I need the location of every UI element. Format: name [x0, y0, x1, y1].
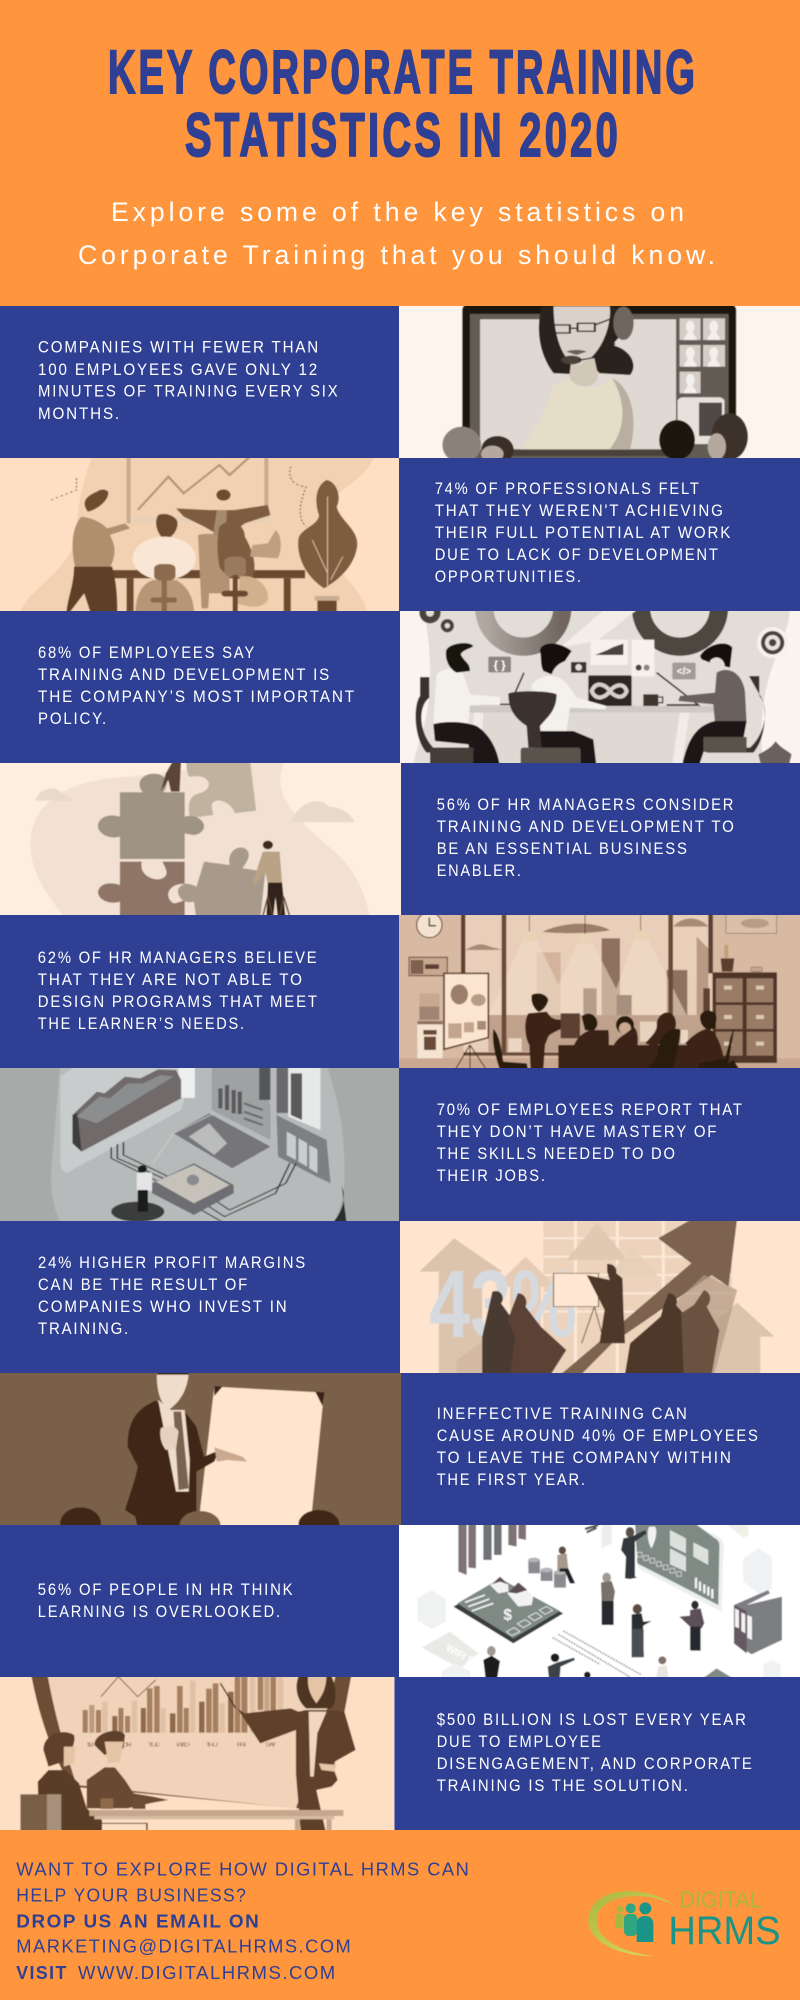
illustration: isometric business people: WIFI SP: [444, 1643, 482, 1670]
stat text 2: THEIR FULL POTENTIAL AT WORK: [435, 524, 732, 542]
stat text 7: [0, 1221, 400, 1373]
stat text 4: TRAINING AND DEVELOPMENT TO: [437, 818, 736, 836]
panel: row 5 program design: [0, 912, 800, 1072]
stat text 3: THE COMPANY’S MOST IMPORTANT: [38, 688, 356, 706]
stat text 5: THE LEARNER’S NEEDS.: [38, 1015, 246, 1033]
stat text 10: DISENGAGEMENT, AND CORPORATE: [437, 1755, 754, 1773]
stat text 4: [401, 763, 800, 915]
footer call to action: WANT TO EXPLORE HOW DIGITAL HRMS CAN: [16, 1859, 470, 1880]
footer call to action: HELP YOUR BUSINESS?: [16, 1885, 247, 1906]
stat text 1: COMPANIES WITH FEWER THAN: [38, 339, 320, 357]
stat text 6: THEIR JOBS.: [437, 1167, 547, 1185]
stat text 7: COMPANIES WHO INVEST IN: [38, 1298, 288, 1316]
stat text 1: [0, 306, 399, 458]
stat text 1: MONTHS.: [38, 405, 121, 423]
illustration: presenter with bar chart: [0, 1672, 403, 1835]
stat text 2: 74% OF PROFESSIONALS FELT: [435, 480, 701, 498]
stat text 8: INEFFECTIVE TRAINING CAN: [437, 1405, 689, 1423]
stat text 2: [399, 458, 800, 611]
panel: row 8 ineffective training: [0, 1373, 800, 1525]
footer call to action: WWW.DIGITALHRMS.COM: [78, 1962, 337, 1983]
illustration: developers at a table: [400, 611, 800, 763]
stat text 5: THAT THEY ARE NOT ABLE TO: [38, 971, 304, 989]
stat text 9: LEARNING IS OVERLOOKED.: [38, 1603, 282, 1621]
stat text 5: [0, 915, 399, 1068]
stat text 4: ENABLER.: [437, 862, 523, 880]
header panel: [0, 0, 800, 306]
stat text 5: 62% OF HR MANAGERS BELIEVE: [38, 949, 318, 967]
illustration: presenter with bar chart: SU: [87, 1742, 94, 1748]
stat text 10: $500 BILLION IS LOST EVERY YEAR: [437, 1711, 748, 1729]
stat text 3: [0, 611, 400, 763]
subtitle: Explore some of the key statistics on: [111, 197, 688, 227]
stat text 7: 24% HIGHER PROFIT MARGINS: [38, 1254, 307, 1272]
illustration: presenter with bar chart: TUE: [148, 1742, 161, 1748]
illustration: isometric circuit and chart: [0, 1063, 406, 1225]
footer call to action: [16, 1859, 470, 1983]
illustration: presenter with bar chart: FRI: [237, 1742, 246, 1748]
panel: row 2 professionals potential: [0, 453, 800, 617]
large watermark figure: 43%: [429, 1251, 577, 1358]
stat text 6: [399, 1068, 800, 1221]
stat text 1: MINUTES OF TRAINING EVERY SIX: [38, 383, 340, 401]
illustration: developers at a table: { }: [494, 659, 506, 671]
stat text 3: POLICY.: [38, 710, 108, 728]
stat text 2: THAT THEY WEREN'T ACHIEVING: [435, 502, 725, 520]
panel: row 1 fewer than 100 employees: [0, 300, 800, 464]
illustration: presenter with bar chart: SAT: [265, 1742, 277, 1748]
stat text 4: BE AN ESSENTIAL BUSINESS: [437, 840, 689, 858]
illustration: presenter with bar chart: ON: [122, 1742, 132, 1748]
footer call to action: MARKETING@DIGITALHRMS.COM: [16, 1936, 352, 1957]
stat text 3: 68% OF EMPLOYEES SAY: [38, 644, 256, 662]
title: [108, 38, 698, 169]
stat text 6: THEY DON’T HAVE MASTERY OF: [437, 1123, 718, 1141]
stat text 8: THE FIRST YEAR.: [437, 1471, 587, 1489]
illustration: presenter at flipchart: [0, 1373, 401, 1525]
illustration: growth arrows and silhouettes: [393, 1217, 800, 1377]
illustration: team meeting with chart: [0, 453, 403, 617]
stat text 6: 70% OF EMPLOYEES REPORT THAT: [437, 1101, 744, 1119]
stat text 7: CAN BE THE RESULT OF: [38, 1276, 249, 1294]
logo: Digital HRMS: DIGITAL: [679, 1887, 762, 1913]
illustration: office meeting room: [397, 912, 800, 1072]
panel: row 10 disengagement: [0, 1672, 800, 1835]
stat text 5: DESIGN PROGRAMS THAT MEET: [38, 993, 319, 1011]
stat text 10: DUE TO EMPLOYEE: [437, 1733, 603, 1751]
panel: row 9 learning overlooked: [0, 1522, 800, 1682]
stat text 9: 56% OF PEOPLE IN HR THINK: [38, 1581, 294, 1599]
stat text 8: [401, 1373, 800, 1525]
panel: row 7 profit margins: [0, 1217, 800, 1377]
subtitle: [78, 197, 719, 270]
stat text 6: THE SKILLS NEEDED TO DO: [437, 1145, 677, 1163]
logo: Digital HRMS: [588, 1887, 781, 1956]
stat text 3: TRAINING AND DEVELOPMENT IS: [38, 666, 331, 684]
stat text 2: OPPORTUNITIES.: [435, 568, 583, 586]
illustration: puzzle pieces: [0, 757, 408, 920]
stat text 10: [394, 1677, 800, 1830]
illustration: developers at a table: </>: [677, 666, 691, 677]
illustration: isometric business people: [397, 1522, 800, 1682]
stat text 4: 56% OF HR MANAGERS CONSIDER: [437, 796, 735, 814]
panel: row 4 business enabler: [0, 757, 800, 920]
logo: Digital HRMS: HRMS: [668, 1909, 781, 1953]
panel: row 3 most important policy: [0, 611, 800, 763]
stat text 1: 100 EMPLOYEES GAVE ONLY 12: [38, 361, 319, 379]
stat text 8: CAUSE AROUND 40% OF EMPLOYEES: [437, 1427, 760, 1445]
stat text 2: DUE TO LACK OF DEVELOPMENT: [435, 546, 720, 564]
stat text 8: TO LEAVE THE COMPANY WITHIN: [437, 1449, 733, 1467]
stat text 9: [0, 1525, 399, 1677]
footer call to action: VISIT: [16, 1962, 68, 1983]
subtitle: Corporate Training that you should know.: [78, 240, 719, 270]
footer call to action: DROP US AN EMAIL ON: [16, 1911, 260, 1932]
footer panel: [0, 1830, 800, 2000]
stat text 7: TRAINING.: [38, 1320, 130, 1338]
stat text 10: TRAINING IS THE SOLUTION.: [437, 1777, 690, 1795]
illustration: video call on monitor: [393, 300, 800, 464]
illustration: presenter with bar chart: THU: [206, 1742, 218, 1748]
silhouettes of presenter and team: [482, 1264, 719, 1374]
illustration: isometric business people: $: [503, 1607, 512, 1624]
panel: row 6 skills mastery: [0, 1063, 800, 1225]
illustration: presenter with bar chart: WED: [176, 1742, 190, 1748]
